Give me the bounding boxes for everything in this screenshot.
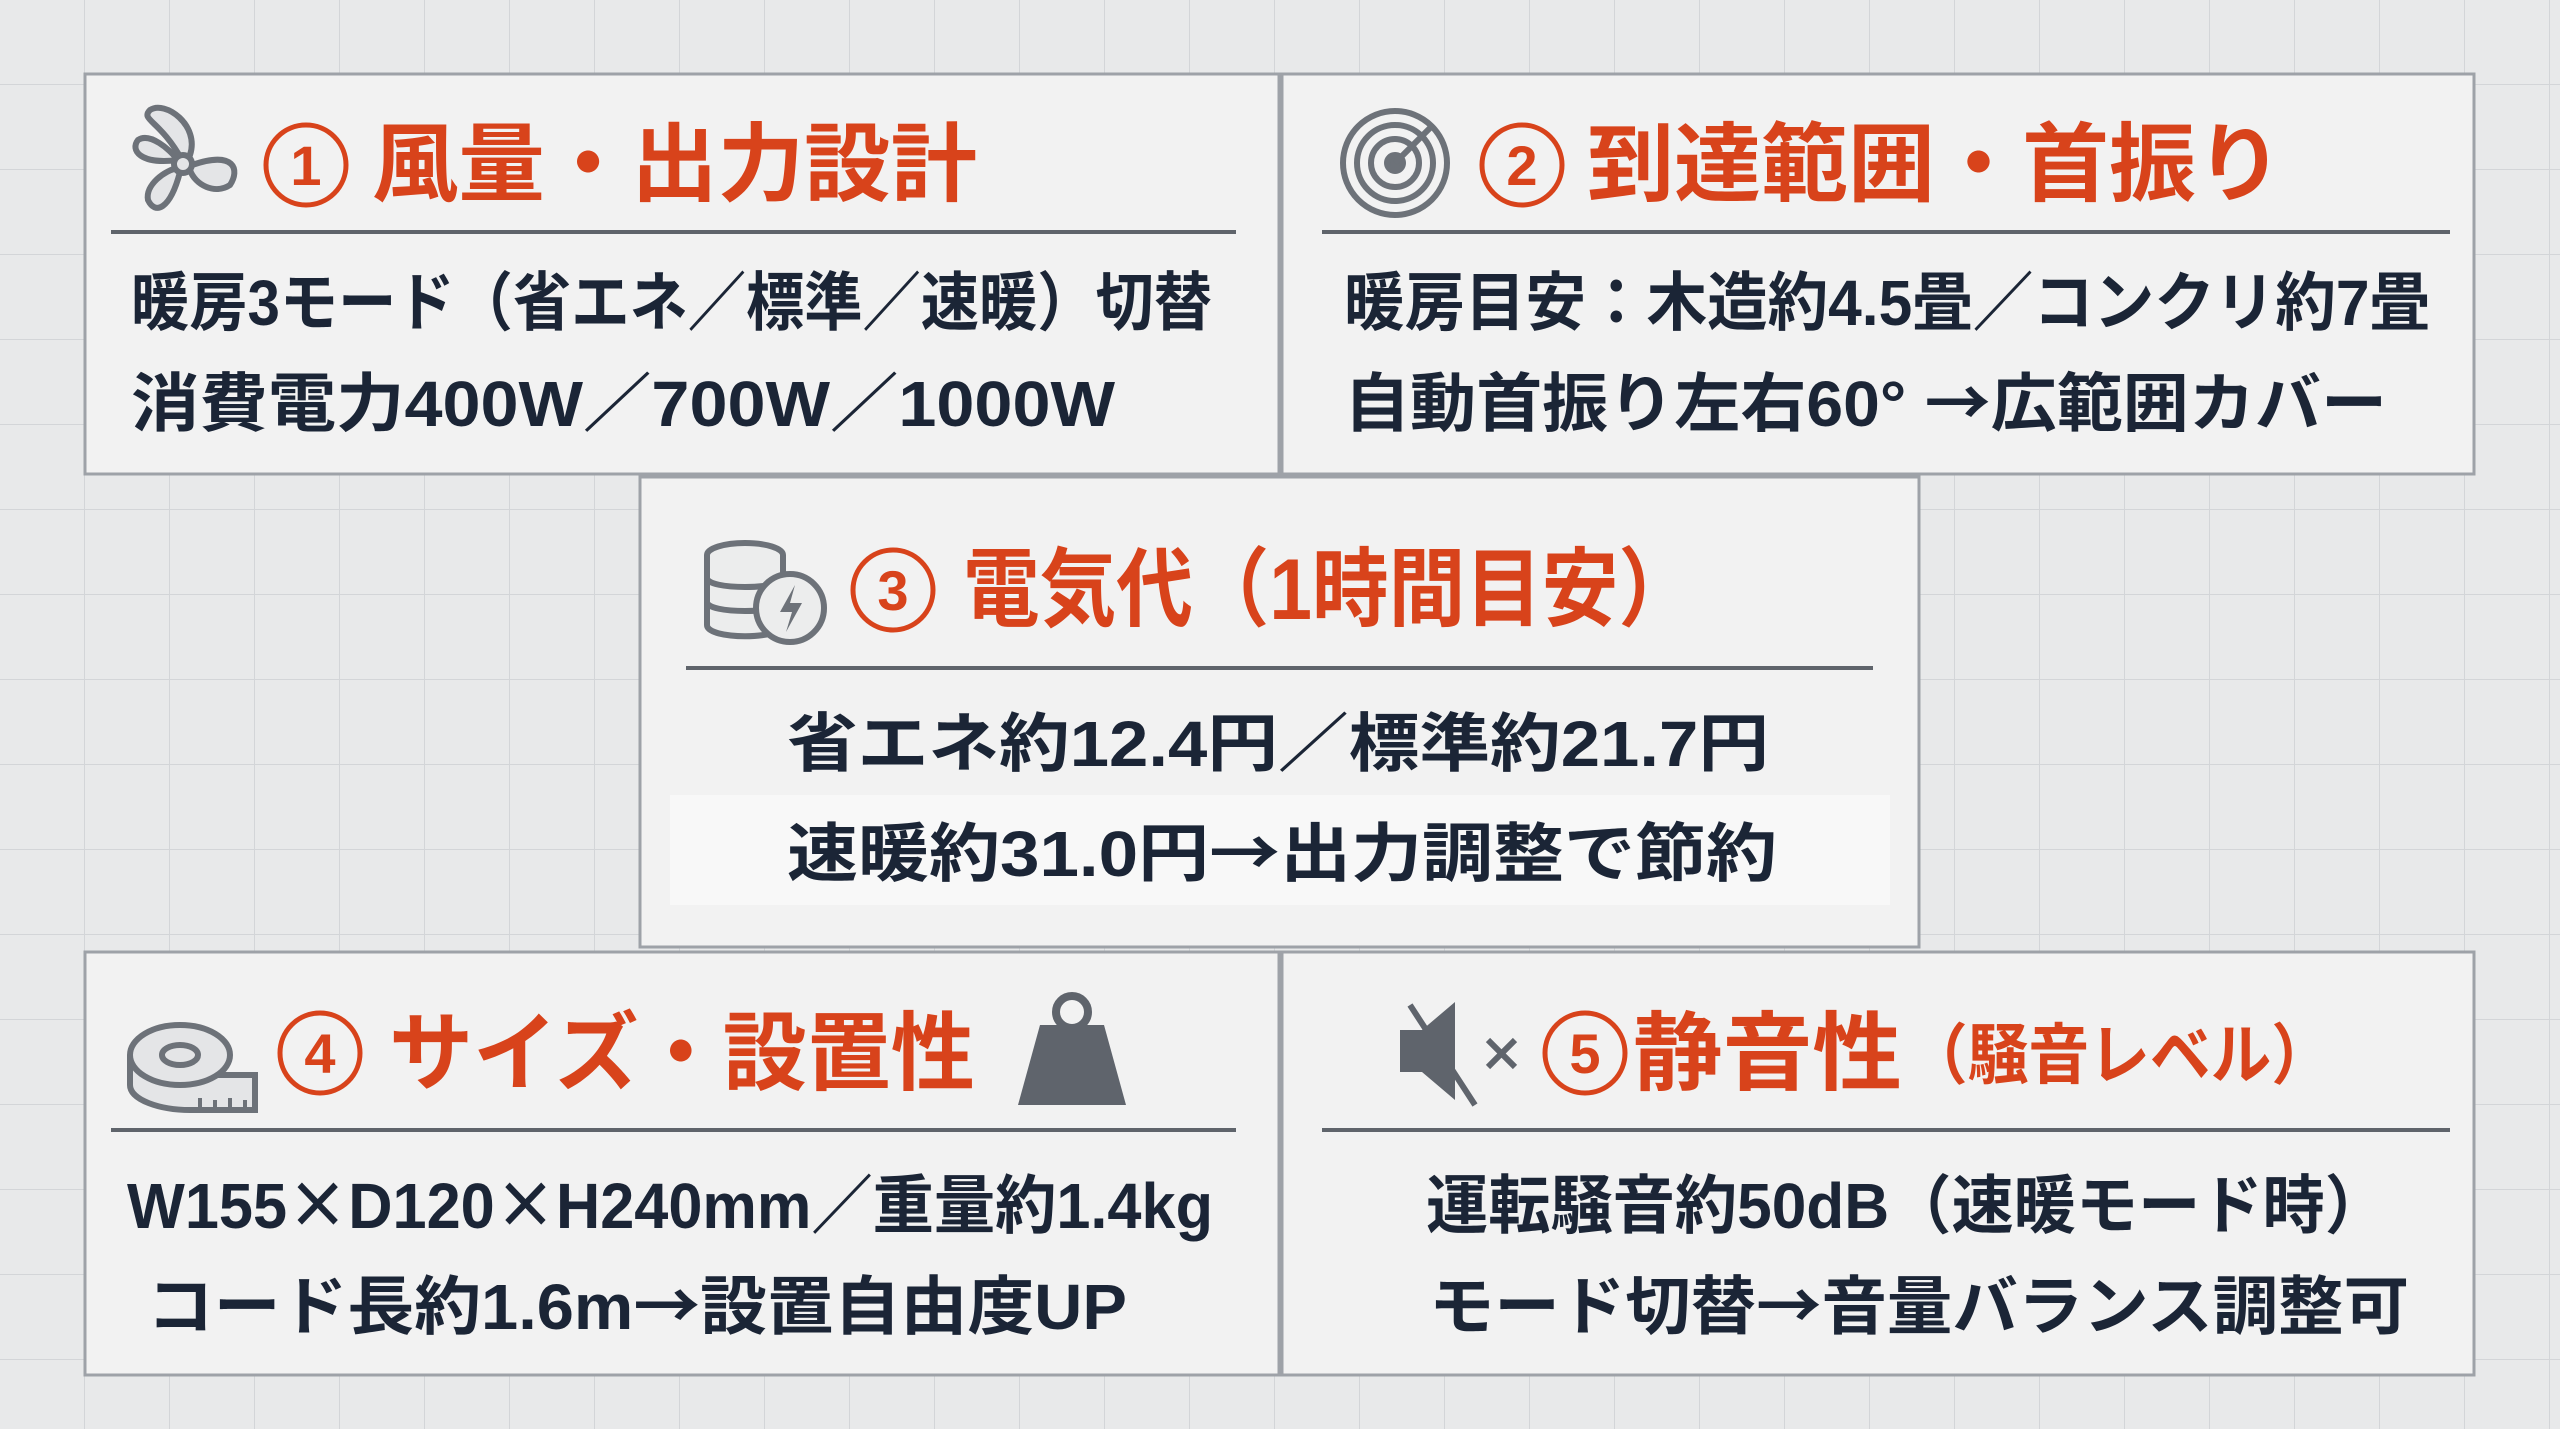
icon: muted speaker: [1400, 1002, 1515, 1105]
heading: サイズ・設置性: [389, 1006, 975, 1102]
text block: [1344, 267, 2430, 445]
panel: 電気代: [640, 477, 1919, 947]
text block: [787, 708, 1777, 895]
circled number 1: 1: [290, 134, 322, 197]
circled number 1: [266, 125, 346, 205]
panel: 到達範囲・首振り: [1282, 74, 2474, 474]
text block: コード長約1.6m →設置自由度UP: [147, 1256, 1127, 1348]
text block: モード切替→音量バランス調整可: [1429, 1256, 2409, 1348]
text block: 自動首振り左右60° →広範囲カバー: [1344, 353, 2387, 445]
icon: target: [1343, 111, 1447, 215]
text block: 省エネ約12.4円／標準約21.7円: [787, 708, 1769, 780]
heading: （騒音レベル）: [1907, 1018, 2332, 1092]
text block: 運転騒音約50dB（速暖モード時）: [1426, 1170, 2387, 1242]
text block: 消費電力400W／700W／1000W: [131, 368, 1116, 440]
panel: 風量・出力設計: [85, 74, 1279, 474]
text block: W155×D120×H240mm／重量約1.4kg: [127, 1155, 1213, 1247]
text block: 速暖約31.0円 →出力調整で節約: [787, 803, 1777, 895]
icon: fan: [135, 108, 234, 208]
circled number 5: [1545, 1013, 1625, 1093]
circled number 2: 2: [1506, 134, 1538, 197]
heading: 到達範囲・首振り: [1587, 117, 2283, 213]
circled number 5: 5: [1569, 1022, 1601, 1085]
heading: 電気代（1時間目安）: [963, 542, 1695, 638]
text block: 暖房3モード（省エネ／標準／速暖）切替: [131, 267, 1212, 339]
panel: サイズ・設置性: [85, 952, 1279, 1375]
text block: [131, 267, 1212, 440]
heading: 風量・出力設計: [372, 117, 977, 213]
text block: [127, 1155, 1213, 1348]
icon: weight: [1018, 996, 1126, 1105]
text block: [1426, 1170, 2409, 1348]
text block: 暖房目安：木造約4.5畳／コンクリ約7畳: [1344, 267, 2430, 339]
icon: coins with bolt: [707, 543, 824, 642]
icon: tape measure: [130, 1025, 255, 1110]
panel: 静音性: [1282, 952, 2474, 1375]
circled number 4: 4: [304, 1022, 336, 1085]
heading: 静音性: [1633, 1006, 1902, 1102]
circled number 2: [1482, 125, 1562, 205]
heading: [1633, 1006, 2332, 1102]
circled number 3: [853, 550, 933, 630]
circled number 3: 3: [877, 559, 909, 622]
circled number 4: [280, 1013, 360, 1093]
